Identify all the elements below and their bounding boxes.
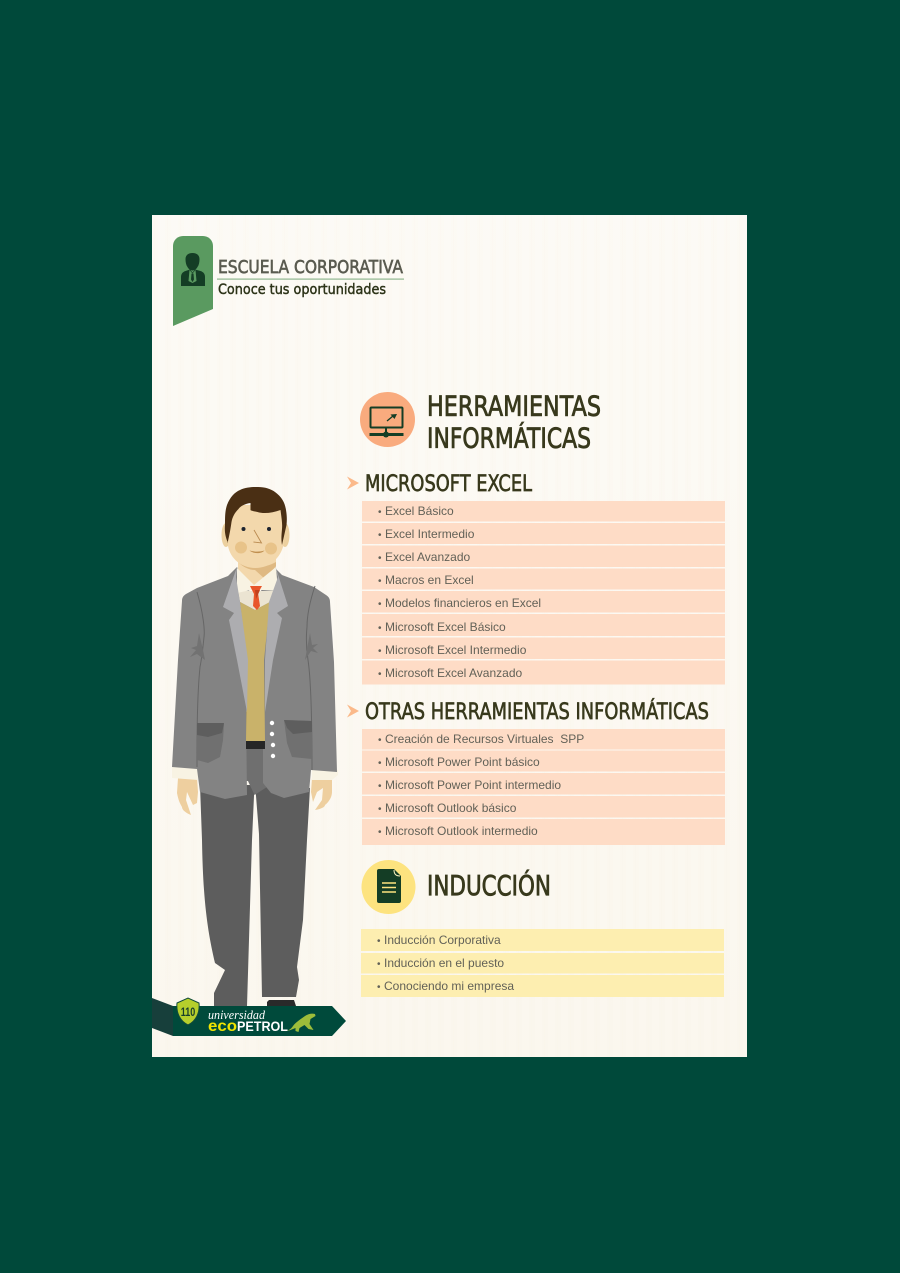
list rows: Conociendo mi empresa [384,979,514,993]
list rows [362,729,725,845]
list rows: • [378,553,382,564]
badge: 110: 110 [181,1005,195,1019]
list rows: • [378,804,382,815]
cuffs [172,767,338,780]
list rows: Creación de Recursos Virtuales SPP [385,732,584,746]
logo text: PETROL [237,1019,288,1034]
list rows [361,929,724,997]
shoe [267,1000,296,1006]
list rows: • [378,646,382,657]
trousers [200,700,310,1006]
list rows: • [377,959,381,970]
section: induccion [361,860,724,997]
section heading: INDUCCIÓN [427,868,551,902]
icon: monitor [360,392,415,447]
list rows: Excel Avanzado [385,550,470,564]
hands [177,778,332,815]
illustration: man in suit [172,487,338,1006]
list rows: Inducción Corporativa [384,933,501,947]
logo text [208,1007,288,1035]
list rows: Microsoft Excel Básico [385,620,506,634]
list rows: Microsoft Power Point básico [385,755,540,769]
lapels [223,565,288,712]
belt [246,741,265,749]
neck [238,556,276,587]
list rows: Excel Básico [385,504,454,518]
list rows: • [378,758,382,769]
list rows: • [378,576,382,587]
list rows: • [378,623,382,634]
arrow [347,476,359,490]
list rows: • [378,827,382,838]
subsection heading: OTRAS HERRAMIENTAS INFORMÁTICAS [365,699,709,725]
list rows: • [377,982,381,993]
list rows: Microsoft Outlook básico [385,801,517,815]
list rows: • [378,735,382,746]
footer banner: universidad ecopetrol [152,998,346,1036]
header: escuela corporativa [173,236,404,326]
logo text: universidad [208,1007,265,1022]
page panel [152,215,747,1057]
header title: ESCUELA CORPORATIVA [218,257,404,278]
vest [240,602,270,741]
list rows: • [377,936,381,947]
list rows [362,501,725,684]
list rows: Microsoft Power Point intermedio [385,778,561,792]
list rows: Microsoft Outlook intermedio [385,824,538,838]
section: herramientas informaticas [360,390,601,454]
elbow folds [190,633,318,660]
buttons [270,721,275,758]
head [222,487,290,568]
list rows: Microsoft Excel Intermedio [385,643,527,657]
logo text: eco [208,1018,237,1035]
subsection: otras herramientas [347,699,725,845]
section heading: HERRAMIENTAS [427,390,601,422]
list rows: • [378,530,382,541]
list rows: Microsoft Excel Avanzado [385,666,523,680]
pockets [197,724,224,763]
list rows: Macros en Excel [385,573,474,587]
list rows: Excel Intermedio [385,527,475,541]
badge: 110 [177,998,199,1025]
list rows: • [378,507,382,518]
subsection: microsoft excel [347,472,725,684]
list rows: • [378,781,382,792]
arrow [347,704,359,718]
list rows: Modelos financieros en Excel [385,596,541,610]
subsection heading: MICROSOFT EXCEL [365,472,533,497]
section heading: INFORMÁTICAS [427,420,591,454]
shirt [237,567,278,610]
icon: document [362,860,416,914]
header subtitle: Conoce tus oportunidades [218,282,386,298]
jacket [172,567,337,799]
section heading [427,390,601,454]
list rows: Inducción en el puesto [384,956,504,970]
icon: iguana [284,1014,316,1032]
list rows: • [378,669,382,680]
icon: green tag with person [173,236,213,326]
list rows: • [378,599,382,610]
tie [250,586,262,610]
